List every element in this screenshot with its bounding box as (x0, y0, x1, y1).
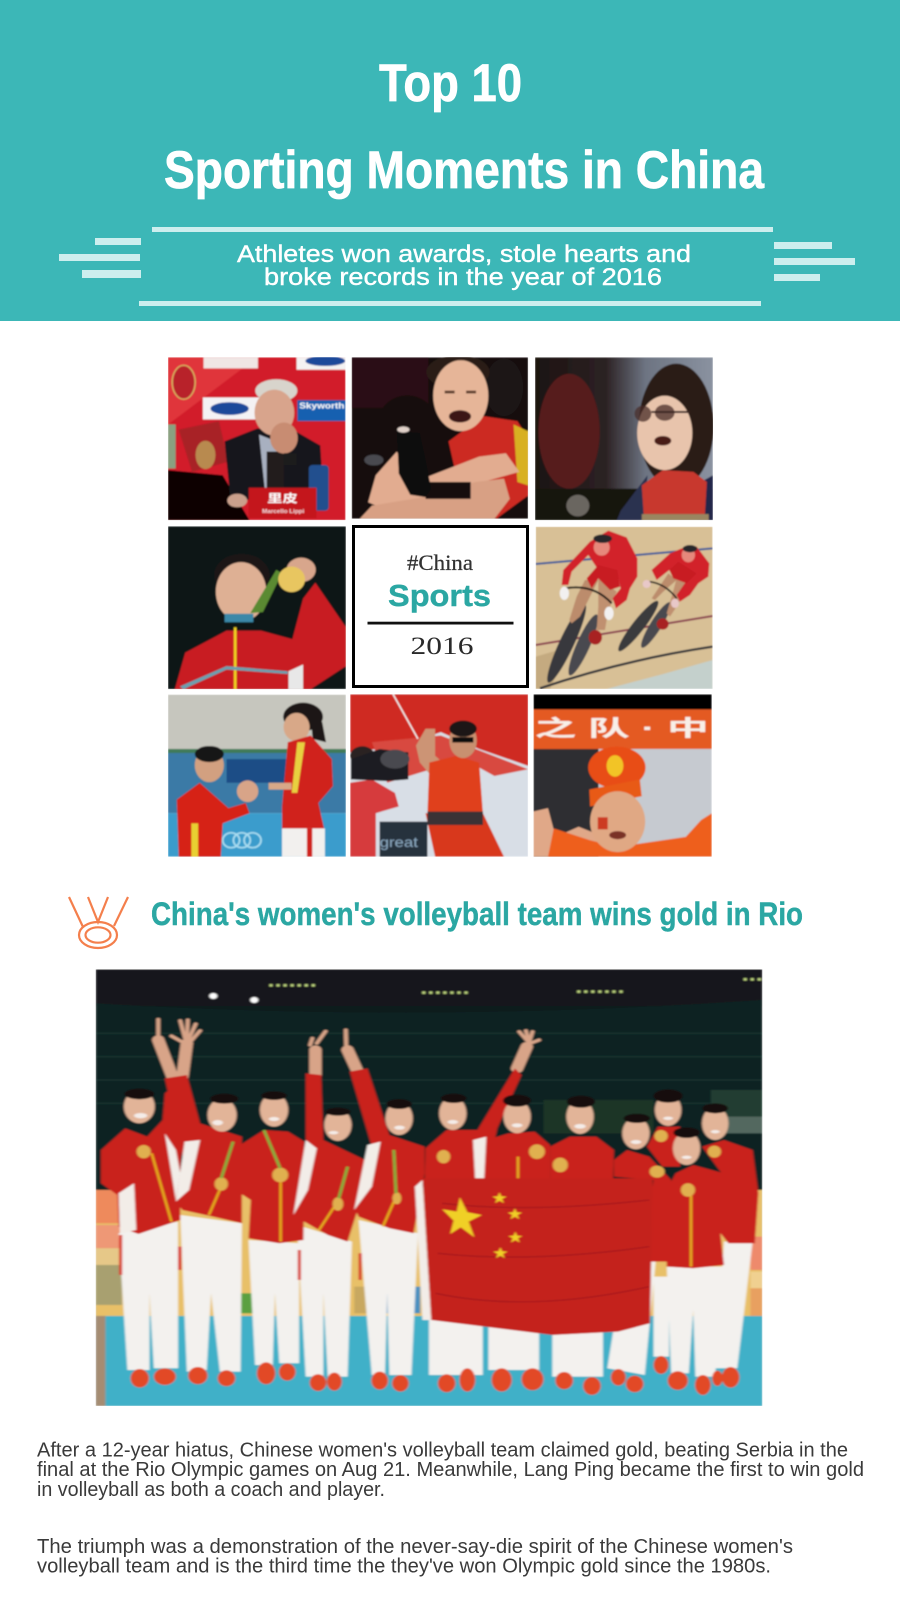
paragraph 1: in volleyball as both a coach and player. (37, 1479, 385, 1501)
paragraph 2: volleyball team and is the third time the they've won Olympic gold since the 1980s. (37, 1556, 771, 1578)
photo tile: fan with feather hat (533, 694, 712, 857)
paragraph 1: final at the Rio Olympic games on Aug 21. Meanwhile, Lang Ping became the first to win gold (37, 1459, 864, 1481)
photo tile: track cyclists (536, 527, 713, 689)
divider line (368, 622, 514, 624)
photo tile: fan with feather hat: 之 队 · 中 (535, 716, 709, 742)
photo tile: swimmer surprised (535, 357, 714, 520)
photo tile: sailor thumbs up: great (380, 835, 419, 851)
2016: 2016 (410, 633, 474, 660)
#China: #China (407, 550, 473, 575)
photo tile: volleyball players embracing (352, 355, 528, 519)
raised arms (158, 1019, 539, 1080)
photo tile: coach at press conference (168, 356, 346, 520)
subtitle: broke records in the year of 2016 (264, 264, 662, 291)
photo tile: sailor thumbs up (350, 694, 528, 857)
paragraph 2 (37, 1536, 793, 1578)
photo tile: coach at press conference: Marcello Lippi (262, 508, 305, 515)
panel: #China Sports 2016 (354, 526, 528, 686)
Sports: Sports (388, 578, 491, 613)
smiles (134, 1113, 720, 1159)
subtitle (237, 241, 691, 291)
title: Sporting Moments in China (164, 141, 764, 200)
body text (37, 1440, 864, 1578)
medals (137, 1130, 721, 1211)
paragraph 1 (37, 1440, 864, 1501)
header banner (0, 0, 900, 321)
photo tile: shooter with gold medal (168, 526, 346, 689)
hair (124, 1089, 728, 1138)
subtitle: Athletes won awards, stole hearts and (237, 241, 691, 268)
title (164, 54, 764, 200)
flag (422, 1178, 653, 1335)
photo tile: coach at press conference: Skyworth (299, 401, 344, 410)
paragraph 2: The triumph was a demonstration of the never-say-die spirit of the Chinese women's (37, 1536, 793, 1558)
photo tile: coach at press conference: 里皮 (267, 492, 298, 505)
icon: medal (69, 897, 128, 948)
photo: volleyball team with flag (96, 969, 762, 1406)
title: Top 10 (379, 54, 522, 113)
photo grid (168, 355, 714, 857)
subtitle frame lines (59, 227, 855, 306)
photo tile: diver proposal (168, 695, 346, 857)
paragraph 1: After a 12-year hiatus, Chinese women's volleyball team claimed gold, beating Serbia in the (37, 1440, 848, 1462)
heads (124, 1090, 728, 1165)
white jacket panels and zips (119, 1133, 486, 1320)
section heading: China's women's volleyball team wins gold in Rio (151, 896, 803, 932)
shoes (131, 1356, 739, 1395)
players jackets (101, 1068, 758, 1268)
players pants (119, 1215, 753, 1377)
